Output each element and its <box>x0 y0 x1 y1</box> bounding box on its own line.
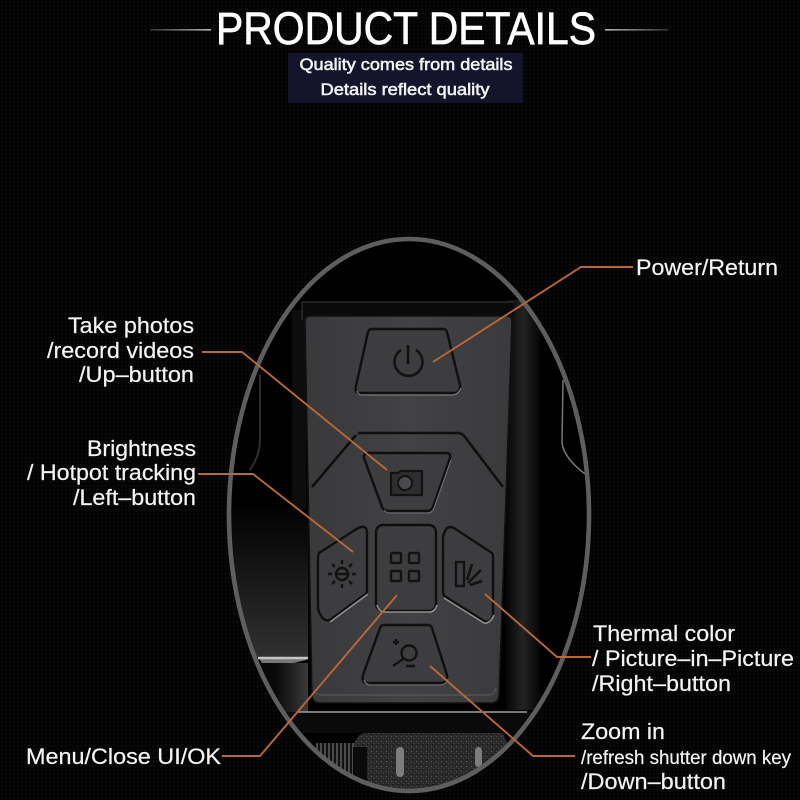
icon: power <box>395 345 422 376</box>
label: thermal color: / Picture–in–Picture <box>592 646 794 671</box>
oval outline <box>229 239 589 791</box>
subtitle band: Quality comes from details <box>300 55 512 74</box>
label: menu: Menu/Close UI/OK <box>26 744 221 769</box>
leader: power <box>433 267 633 362</box>
control panel <box>305 316 512 703</box>
device top band <box>302 302 514 316</box>
leader: brightness <box>198 474 353 552</box>
title: product details: PRODUCT DETAILS <box>216 3 596 54</box>
button: zoom <box>363 625 448 685</box>
button: power <box>356 329 461 395</box>
label: take photos: /record videos <box>47 338 194 363</box>
icon: zoom <box>393 639 416 666</box>
icon: sun <box>328 560 356 588</box>
label: thermal color: Thermal color <box>593 621 735 646</box>
subtitle band <box>288 53 523 103</box>
button: thermal color <box>443 527 494 623</box>
button: brightness <box>318 527 368 622</box>
device side rail <box>508 300 538 710</box>
label: take photos: Take photos <box>68 313 194 338</box>
label: power/return: Power/Return <box>636 255 778 280</box>
left body <box>232 527 308 657</box>
icon: thermal <box>456 562 482 586</box>
left ledge <box>268 663 308 712</box>
button: menu <box>376 525 437 612</box>
leader lines <box>198 267 633 756</box>
button: camera <box>364 453 451 513</box>
icon: menu grid <box>391 553 419 581</box>
label: brightness: Brightness <box>87 436 196 461</box>
label: take photos: /Up–button <box>79 362 194 387</box>
bottom housing <box>286 712 532 733</box>
wires <box>562 380 585 474</box>
subtitle band: Details reflect quality <box>320 80 490 99</box>
icon: camera <box>391 471 422 495</box>
label: brightness: / Hotpot tracking <box>27 460 196 485</box>
label: brightness: /Left–button <box>73 485 196 510</box>
knurled dial <box>354 733 507 789</box>
label: zoom in: /refresh shutter down key <box>581 748 791 769</box>
leader: menu <box>222 595 397 756</box>
label: take photos <box>47 313 194 387</box>
button: camera surround <box>312 433 503 487</box>
label: zoom in: Zoom in <box>581 719 665 744</box>
label: thermal color: /Right–button <box>592 671 731 696</box>
label: thermal color <box>592 621 794 696</box>
device photo in oval frame <box>228 239 590 800</box>
label: zoom in: /Down–button <box>581 769 726 794</box>
label: zoom in <box>581 719 791 794</box>
leader: thermal <box>485 594 591 657</box>
label: brightness <box>27 436 196 510</box>
leader: zoom <box>430 666 575 756</box>
leader: take photos <box>202 352 387 470</box>
